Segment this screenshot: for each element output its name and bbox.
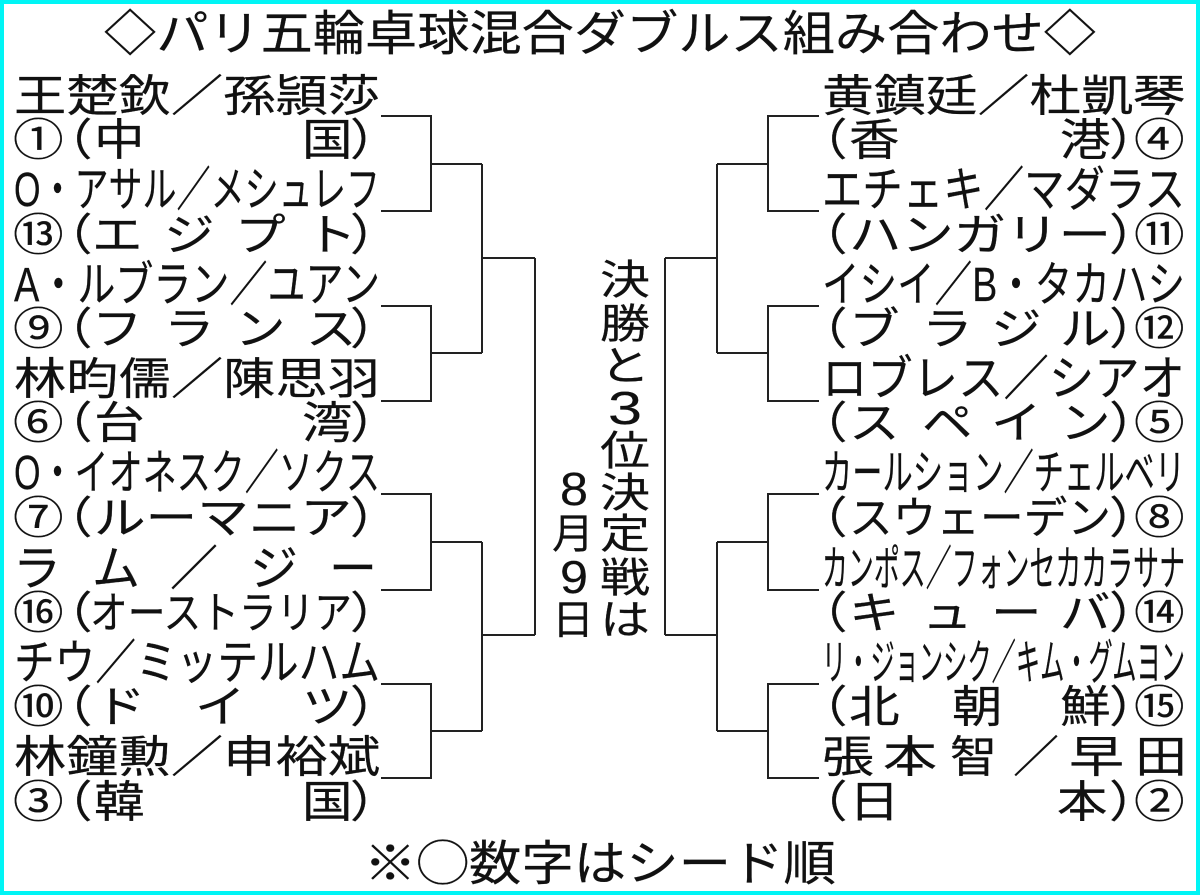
entry: Japan	[797, 733, 1187, 827]
center note: final date: 決	[600, 257, 650, 303]
entry: Australia: ）	[350, 589, 401, 638]
entry: Taiwan: ⑥（台湾）	[13, 399, 401, 448]
entry: Korea: ③（韓国）	[13, 778, 401, 827]
bracket: left	[381, 116, 535, 778]
entry: China: ①（中国）	[13, 116, 401, 165]
entry: Cuba	[797, 543, 1185, 638]
entry: Japan: （日本）②	[797, 778, 1185, 827]
entry: Japan: 早	[1069, 733, 1124, 782]
entry: Japan: 本	[883, 733, 937, 782]
entry: Taiwan	[13, 355, 401, 448]
entry: Romania: ルーマニア	[94, 494, 352, 543]
entry: Hong Kong: （香港）④	[797, 116, 1185, 165]
center note: final date	[552, 257, 650, 643]
entry: Japan: 田	[1135, 733, 1187, 782]
entry: Sweden: ）⑧	[1109, 494, 1185, 543]
footnote: ※◯数字はシード順	[364, 838, 836, 891]
center note: final date: 月	[552, 511, 594, 557]
entry: China	[13, 72, 401, 165]
entry: Taiwan: 林昀儒／陳思羽	[14, 355, 380, 404]
entry: Korea	[13, 733, 401, 827]
entry: Brazil	[797, 259, 1185, 354]
entry: Japan: 智	[950, 733, 997, 782]
entry: Egypt: ⑬（エジプト）	[13, 211, 401, 260]
entry: Spain: ロブレス／シアオ	[822, 353, 1185, 406]
entry: Japan: ／	[1013, 733, 1059, 782]
entry: France	[13, 259, 401, 354]
center note: final date: は	[600, 597, 650, 643]
entry: Germany: ⑩（ドイツ）	[13, 683, 401, 732]
entry: Romania: O・イオネスク／ソクス	[14, 447, 380, 500]
center note: final date: 戦	[600, 555, 650, 601]
entry: North Korea: （北朝鮮）⑮	[797, 683, 1185, 732]
entry: Hungary: ）⑪	[1109, 211, 1185, 260]
center note: final date: 位	[600, 428, 650, 474]
entry: Sweden: スウェーデン	[849, 494, 1111, 543]
entry: Japan: 張	[822, 733, 874, 782]
entry: Hong Kong	[797, 72, 1185, 165]
entry: Germany: チウ／ミッテルハム	[14, 637, 380, 690]
entry: Sweden: （	[797, 494, 848, 543]
center note: final date: 定	[600, 511, 650, 557]
center note: final date: と	[600, 343, 650, 389]
center note: final date: 決	[600, 470, 650, 516]
entry: Hong Kong: 黄鎮廷／杜凱琴	[822, 72, 1185, 121]
entry: Sweden	[797, 447, 1185, 543]
entry: Spain: （スペイン）⑤	[797, 399, 1185, 448]
entry: North Korea	[797, 637, 1185, 732]
entry: Germany	[13, 637, 401, 732]
center note: final date: 3	[608, 382, 642, 434]
entry: Romania	[13, 447, 401, 543]
title: ◇パリ五輪卓球混合ダブルス組み合わせ◇	[104, 8, 1096, 61]
center note: final date: 9	[560, 551, 588, 603]
entry: Romania: ）	[350, 494, 401, 543]
entry: Korea: 林鐘勲／申裕斌	[14, 733, 380, 782]
entry: Hungary	[797, 164, 1185, 260]
entry: Hungary: （	[797, 211, 848, 260]
entry: Egypt: O・アサル／メシュレフ	[14, 164, 380, 217]
entry: Australia: ラム／ジー	[13, 543, 377, 596]
entry: Australia	[13, 543, 401, 638]
entry: Egypt	[13, 164, 401, 260]
center note: final date: 日	[552, 597, 594, 643]
center note: final date: 勝	[600, 301, 650, 347]
entry: Romania: ⑦（	[13, 494, 93, 543]
entry: Hungary: ハンガリー	[849, 211, 1111, 260]
entry: Brazil: （ブラジル）⑫	[797, 305, 1185, 354]
bracket: right	[665, 116, 819, 778]
entry: China: 王楚欽／孫頴莎	[14, 72, 380, 121]
entry: Cuba: （キューバ）⑭	[797, 589, 1185, 638]
entry: France: A・ルブラン／ユアン	[14, 259, 380, 312]
center note: final date: 8	[560, 463, 588, 515]
entry: Australia: ⑯（	[13, 589, 93, 638]
entry: France: ⑨（フランス）	[13, 305, 401, 354]
entry: Australia: オーストラリア	[90, 589, 352, 638]
entry: Spain	[797, 353, 1185, 448]
